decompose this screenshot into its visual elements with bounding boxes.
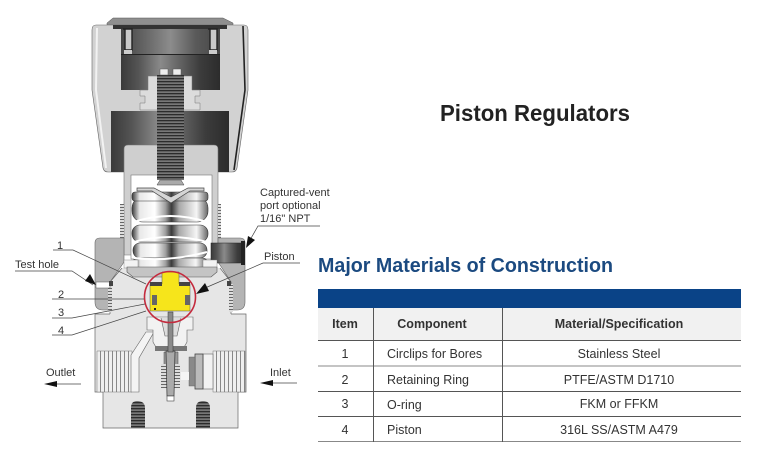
callout: 1: 1 bbox=[57, 240, 63, 252]
table row 3: 3 bbox=[342, 397, 349, 411]
table row 4: 316L SS/ASTM A479 bbox=[560, 423, 678, 437]
bottom mounting holes bbox=[131, 401, 210, 428]
callout: 3 bbox=[52, 304, 145, 319]
table column header row bbox=[318, 308, 741, 340]
title: Piston Regulators bbox=[440, 100, 630, 126]
lower body bbox=[95, 260, 246, 428]
table row 3: FKM or FFKM bbox=[580, 397, 658, 411]
callout: captured-vent port bbox=[246, 187, 330, 248]
callout: 4 bbox=[52, 311, 146, 337]
table row 2: 2 bbox=[342, 373, 349, 387]
callout: test hole bbox=[15, 259, 96, 285]
table row 2: PTFE/ASTM D1710 bbox=[564, 373, 674, 387]
callout: piston: Piston bbox=[264, 251, 295, 263]
vent port plug bbox=[211, 241, 245, 265]
table row 4 bbox=[342, 423, 678, 437]
outlet port bbox=[97, 332, 154, 392]
callout: 2 bbox=[52, 289, 144, 301]
poppet assembly bbox=[147, 312, 193, 401]
regulator cross-section diagram bbox=[92, 18, 248, 428]
table row 4: Piston bbox=[387, 423, 422, 437]
adjusting screw bbox=[157, 69, 184, 185]
callout: captured-vent port: 1/16" NPT bbox=[260, 213, 311, 225]
table column header row: Item bbox=[332, 317, 358, 331]
table row 1: Stainless Steel bbox=[578, 347, 660, 361]
label: inlet bbox=[260, 367, 297, 386]
label: outlet bbox=[44, 367, 81, 387]
callout: 4: 4 bbox=[58, 325, 64, 337]
inlet port bbox=[189, 351, 245, 392]
upper cavity bbox=[121, 28, 220, 90]
test hole bbox=[96, 282, 110, 288]
table row 3 bbox=[342, 397, 658, 412]
table column header row: Material/Specification bbox=[555, 317, 683, 331]
callout: 2: 2 bbox=[58, 289, 64, 301]
label: outlet: Outlet bbox=[46, 367, 75, 379]
callout: 1 bbox=[53, 240, 146, 284]
callout: test hole: Test hole bbox=[15, 259, 59, 271]
spring seat plate bbox=[127, 267, 217, 277]
table row 3: O-ring bbox=[387, 398, 422, 412]
table column header row: Component bbox=[397, 317, 468, 331]
table row 1: Circlips for Bores bbox=[387, 347, 482, 361]
piston highlight bbox=[144, 272, 196, 322]
table row 2: Retaining Ring bbox=[387, 373, 469, 387]
table row 1: 1 bbox=[342, 347, 349, 361]
table row 4: 4 bbox=[342, 423, 349, 437]
bonnet bbox=[120, 145, 221, 259]
table row 2 bbox=[342, 373, 674, 387]
label: inlet: Inlet bbox=[270, 367, 291, 379]
callout: piston bbox=[196, 251, 300, 294]
spring bbox=[132, 188, 208, 268]
adjusting cap bbox=[92, 18, 248, 172]
callout: 3: 3 bbox=[58, 307, 64, 319]
lower cavity bbox=[111, 111, 229, 172]
materials table bbox=[318, 289, 741, 442]
body upper housing bbox=[95, 238, 245, 310]
table blue header bar bbox=[318, 289, 741, 308]
callout: captured-vent port: Captured-vent bbox=[260, 187, 330, 199]
center hub bbox=[140, 76, 200, 110]
heading: major materials: Major Materials of Construction bbox=[318, 255, 613, 277]
callout: captured-vent port: port optional bbox=[260, 200, 321, 212]
table row 1 bbox=[342, 347, 660, 361]
